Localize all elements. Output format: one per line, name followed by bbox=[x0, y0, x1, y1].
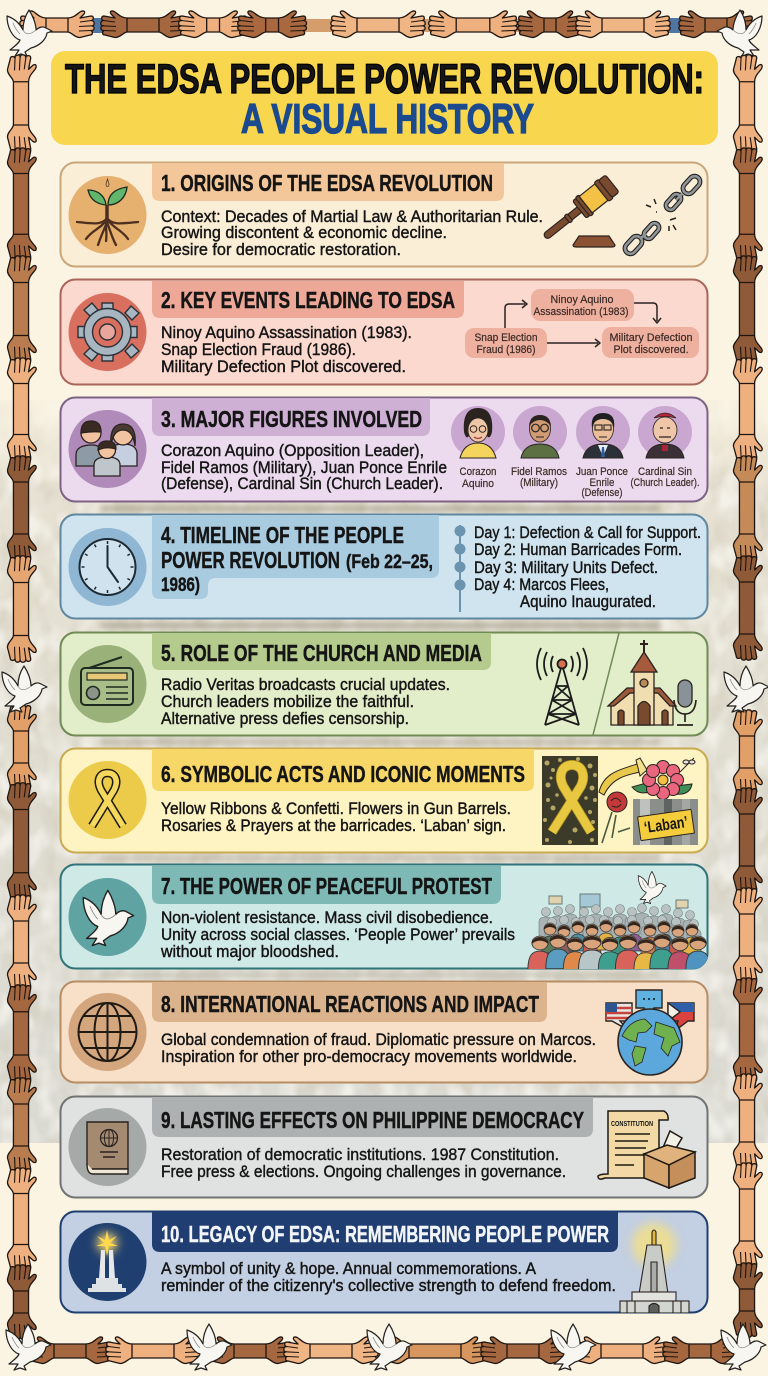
panel 2: key events bbox=[60, 280, 708, 384]
body text bbox=[161, 675, 450, 728]
body text bbox=[161, 323, 412, 376]
body text: Church leaders mobilize the faithful. bbox=[161, 692, 414, 711]
heading bbox=[161, 522, 433, 596]
icon: constitution scroll and ballot box: CONSTITUTION bbox=[611, 1119, 653, 1128]
portrait: Juan Ponce Enrile bbox=[576, 406, 630, 458]
illustration: monument with glow bbox=[620, 1223, 689, 1313]
portrait labels: Fidel Ramos bbox=[511, 466, 567, 478]
photo: Laban sign: ‘Laban’ bbox=[643, 814, 689, 837]
icon: radio bbox=[68, 645, 146, 723]
flow diagram: Snap Election bbox=[474, 332, 538, 344]
body text bbox=[160, 908, 515, 961]
portrait: Cardinal Sin bbox=[638, 406, 692, 458]
portrait labels: (Military) bbox=[520, 477, 558, 489]
timeline list: Aquino Inaugurated. bbox=[520, 592, 656, 611]
timeline list: Day 1: Defection & Call for Support. bbox=[474, 523, 701, 542]
photo: yellow ribbon on confetti bbox=[542, 756, 598, 845]
icon: dove circle bbox=[68, 878, 146, 956]
body text bbox=[161, 1030, 596, 1066]
heading: 2. KEY EVENTS LEADING TO EDSA bbox=[161, 287, 455, 313]
portrait: Fidel Ramos bbox=[513, 406, 567, 458]
flow diagram: Plot discovered. bbox=[614, 344, 688, 356]
icon: clock bbox=[68, 528, 146, 606]
body text: Alternative press defies censorship. bbox=[161, 709, 409, 728]
icon: broken chain bbox=[623, 174, 702, 256]
bottom hand chain bbox=[28, 1337, 737, 1364]
body text: Non-violent resistance. Mass civil disobedience. bbox=[161, 908, 493, 927]
icon: flowers bbox=[599, 758, 695, 843]
body text: (Defense), Cardinal Sin (Church Leader). bbox=[161, 474, 443, 493]
body text bbox=[161, 799, 511, 835]
illustration: globe with flags bbox=[606, 990, 694, 1075]
heading: 1986) bbox=[161, 575, 200, 596]
heading: POWER REVOLUTION bbox=[161, 547, 340, 573]
flow diagram: Ninoy Aquino bbox=[550, 294, 614, 306]
body text: Unity across social classes. ‘People Power’ prevails bbox=[161, 925, 515, 944]
icon: church bbox=[608, 640, 676, 725]
panel 6: symbolic acts bbox=[60, 748, 708, 852]
panel 7: peaceful protest bbox=[60, 864, 710, 971]
photo: Laban sign bbox=[633, 799, 698, 845]
icon: constitution scroll and ballot box bbox=[598, 1111, 695, 1188]
body text bbox=[161, 1259, 616, 1295]
illustration: crowd with flags and dove bbox=[528, 871, 710, 971]
body text: Restoration of democratic institutions. 1987 Constitution. bbox=[161, 1145, 559, 1164]
portrait labels bbox=[460, 466, 700, 499]
body text bbox=[161, 441, 447, 493]
timeline list: Day 4: Marcos Flees, bbox=[474, 575, 609, 594]
body text: Radio Veritas broadcasts crucial updates. bbox=[161, 675, 450, 694]
heading: 4. TIMELINE OF THE PEOPLE bbox=[161, 522, 404, 548]
body text: without major bloodshed. bbox=[160, 942, 339, 961]
icon: plant with roots bbox=[68, 176, 146, 254]
icon: constitution book bbox=[68, 1108, 146, 1186]
body text: Snap Election Fraud (1986). bbox=[161, 340, 356, 359]
heading: 5. ROLE OF THE CHURCH AND MEDIA bbox=[161, 640, 482, 666]
heading: 8. INTERNATIONAL REACTIONS AND IMPACT bbox=[161, 991, 539, 1017]
heading: (Feb 22–25, bbox=[346, 552, 433, 573]
body text: Fidel Ramos (Military), Juan Ponce Enrile bbox=[161, 458, 447, 477]
icon: gear bbox=[68, 293, 146, 371]
icon: ribbon outline bbox=[68, 761, 146, 839]
heading: 3. MAJOR FIGURES INVOLVED bbox=[161, 406, 422, 432]
panel 1: origins bbox=[60, 162, 708, 266]
body text: Inspiration for other pro-democracy movements worldwide. bbox=[161, 1047, 577, 1066]
timeline list: Day 3: Military Units Defect. bbox=[474, 558, 658, 577]
heading: 9. LASTING EFFECTS ON PHILIPPINE DEMOCRACY bbox=[161, 1107, 584, 1133]
timeline list bbox=[454, 523, 701, 612]
portrait labels: (Church Leader). bbox=[630, 477, 700, 489]
icon: radio tower bbox=[537, 648, 587, 725]
portrait: Corazon Aquino bbox=[451, 406, 505, 458]
panel 3: major figures bbox=[60, 398, 708, 502]
body text: reminder of the citizenry's collective strength to defend freedom. bbox=[161, 1276, 616, 1295]
flow diagram: Fraud (1986) bbox=[476, 344, 536, 356]
body text: Military Defection Plot discovered. bbox=[161, 357, 406, 376]
body text: A symbol of unity & hope. Annual commemorations. A bbox=[161, 1259, 537, 1278]
panel 5: church and media bbox=[60, 632, 708, 736]
icon: microphone bbox=[674, 680, 696, 725]
body text bbox=[161, 1145, 566, 1181]
body text: Growing discontent & economic decline. bbox=[161, 223, 447, 242]
icon: line globe bbox=[68, 993, 146, 1071]
body text: Corazon Aquino (Opposition Leader), bbox=[161, 441, 424, 460]
body text: Ninoy Aquino Assassination (1983). bbox=[161, 323, 412, 342]
body text: Desire for democratic restoration. bbox=[161, 240, 401, 259]
left hand chain bbox=[7, 55, 36, 1339]
heading: 1. ORIGINS OF THE EDSA REVOLUTION bbox=[161, 170, 493, 196]
portrait labels: Enrile bbox=[590, 477, 614, 489]
panel 4: timeline bbox=[60, 514, 708, 618]
portrait labels: Juan Ponce bbox=[576, 466, 628, 478]
portrait labels: Aquino bbox=[462, 478, 494, 490]
heading: 6. SYMBOLIC ACTS AND ICONIC MOMENTS bbox=[161, 761, 525, 787]
icon: group of people bbox=[68, 410, 146, 488]
portrait labels: (Defense) bbox=[582, 487, 623, 499]
top hand chain bbox=[20, 11, 753, 38]
panel 9: lasting effects bbox=[60, 1096, 708, 1198]
body text: Context: Decades of Martial Law & Authoritarian Rule. bbox=[161, 207, 543, 226]
icon: gavel bbox=[538, 174, 620, 247]
body text: Free press & elections. Ongoing challenges in governance. bbox=[161, 1162, 566, 1181]
body text: Global condemnation of fraud. Diplomatic pressure on Marcos. bbox=[161, 1030, 596, 1049]
timeline list: Day 2: Human Barricades Form. bbox=[474, 540, 682, 559]
portrait labels: Cardinal Sin bbox=[638, 466, 692, 478]
panel 10: legacy bbox=[60, 1212, 708, 1313]
icon: monument in circle bbox=[68, 1223, 146, 1301]
portrait labels: Corazon bbox=[460, 466, 496, 478]
right hand chain bbox=[733, 55, 762, 1337]
flow diagram bbox=[465, 289, 699, 358]
flow diagram: Assassination (1983) bbox=[534, 306, 629, 318]
flow diagram: Military Defection bbox=[610, 332, 692, 344]
title banner: A VISUAL HISTORY bbox=[241, 95, 534, 142]
panel 8: international reactions bbox=[60, 982, 708, 1082]
body text bbox=[161, 207, 543, 259]
heading: 7. THE POWER OF PEACEFUL PROTEST bbox=[161, 873, 492, 899]
title banner bbox=[51, 51, 718, 145]
body text: Rosaries & Prayers at the barricades. ‘Laban’ sign. bbox=[161, 816, 506, 835]
body text: Yellow Ribbons & Confetti. Flowers in Gun Barrels. bbox=[161, 799, 511, 818]
